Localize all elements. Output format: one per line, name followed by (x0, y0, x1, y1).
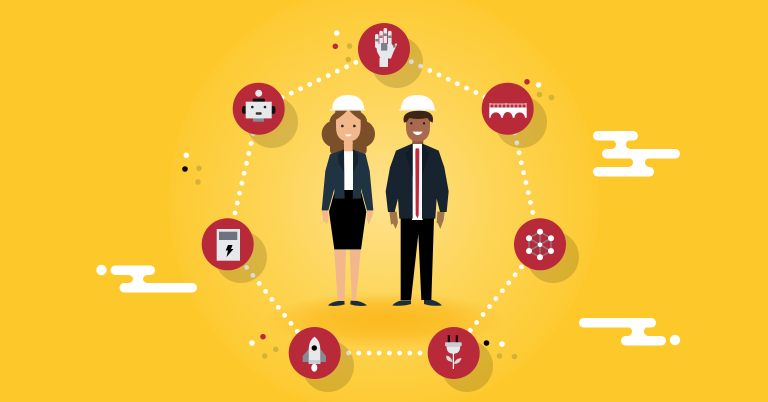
man face (406, 117, 430, 141)
confetti dots: upper right (524, 79, 554, 100)
man shoes (392, 300, 442, 306)
man shirt and tie (412, 144, 423, 220)
cloud: top right (593, 131, 680, 176)
figure: woman engineer (322, 95, 375, 306)
woman hair (322, 109, 375, 155)
icon: bridge (482, 83, 547, 148)
confetti dots: left (182, 152, 202, 185)
figure: man engineer (386, 95, 449, 306)
man hair (403, 111, 433, 123)
floor glow (265, 292, 505, 348)
woman shirt (344, 151, 353, 190)
woman shoes (328, 301, 367, 306)
cloud: bottom right (579, 318, 680, 346)
confetti dots: top (332, 30, 352, 62)
woman hard hat (332, 95, 364, 109)
man hard hat (401, 95, 435, 109)
woman skirt (329, 190, 366, 249)
icon: robot head (233, 83, 298, 148)
woman legs (334, 247, 361, 301)
dotted heptagon connector (228, 49, 540, 353)
icon: plug with leaves (428, 327, 493, 392)
woman face (336, 109, 361, 141)
man neck (412, 135, 423, 147)
man hands (389, 212, 445, 229)
woman hands (322, 210, 373, 224)
radial glow (169, 0, 599, 402)
icon: molecule network (514, 218, 579, 283)
man trousers (401, 218, 434, 300)
confetti dots: lower left (249, 334, 279, 359)
cloud: left (96, 265, 197, 292)
man jacket (386, 143, 449, 219)
woman neck (344, 138, 353, 153)
confetti dots: lower right (484, 340, 517, 359)
icon: rocket (289, 327, 354, 392)
icon: robotic hand (358, 23, 423, 88)
woman jacket (322, 149, 373, 210)
icon: power meter (202, 218, 267, 283)
